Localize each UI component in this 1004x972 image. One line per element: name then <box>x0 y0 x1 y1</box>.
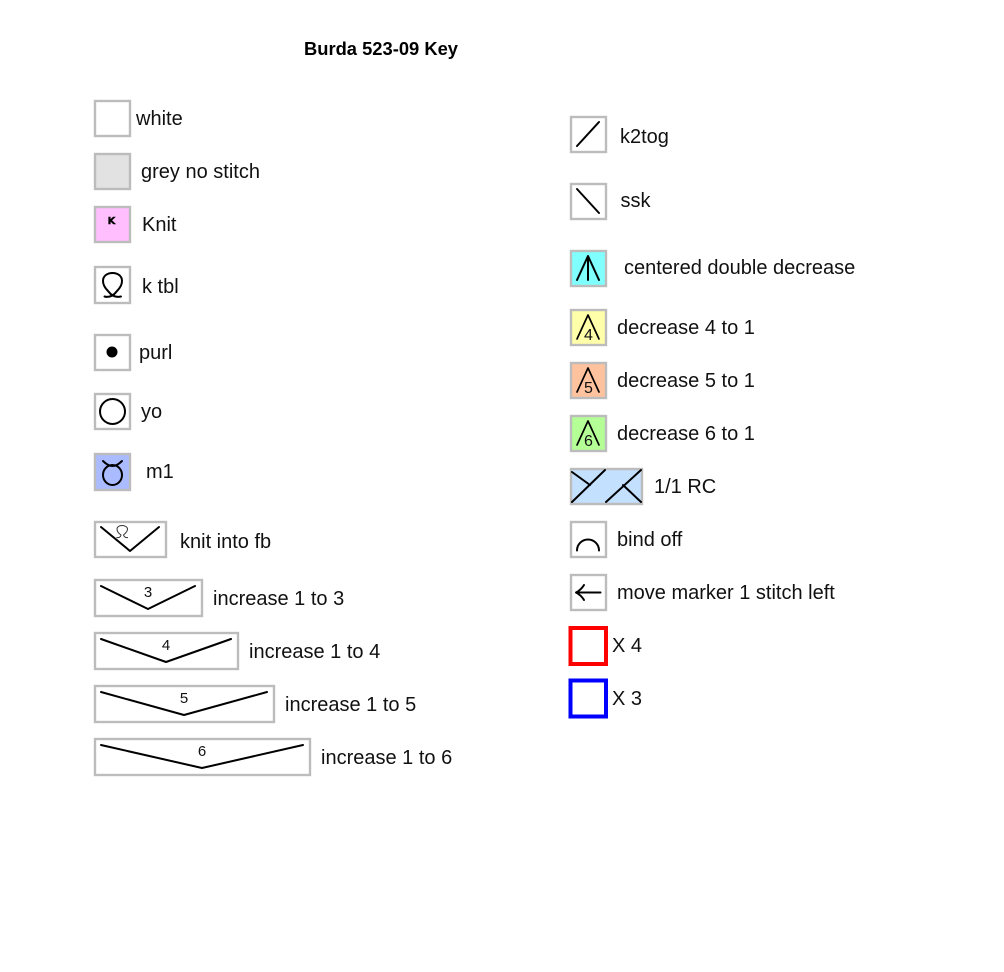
key item: decrease 5 to 1: 5 <box>584 380 593 397</box>
key item: decrease 6 to 1 <box>571 416 755 451</box>
title: Burda 523-09 Key <box>304 38 459 59</box>
key item: centered double decrease <box>571 251 855 286</box>
key item: m1: m1 <box>146 461 174 483</box>
key item: increase 1 to 6: increase 1 to 6 <box>321 747 452 769</box>
key item: ssk <box>571 184 652 219</box>
key item: increase 1 to 4: 4 <box>162 637 170 654</box>
key item: increase 1 to 5: 5 <box>180 690 188 707</box>
key item: k tbl <box>95 267 179 303</box>
key item: 1/1 RC: 1/1 RC <box>654 476 716 498</box>
key item: decrease 6 to 1: 6 <box>584 433 593 450</box>
key item: decrease 4 to 1: decrease 4 to 1 <box>617 317 755 339</box>
key item: increase 1 to 5: increase 1 to 5 <box>285 694 416 716</box>
key item: centered double decrease: centered double decrease <box>624 257 855 279</box>
key item: 1/1 RC <box>571 469 716 504</box>
key item: X 4: X 4 <box>612 635 642 657</box>
key item: decrease 4 to 1 <box>571 310 755 345</box>
key item: k2tog: k2tog <box>620 126 669 148</box>
key item: X 4 <box>570 628 642 664</box>
key item: decrease 5 to 1 <box>571 363 755 398</box>
key item: knit into fb: knit into fb <box>180 531 271 553</box>
key item: k tbl: k tbl <box>142 276 179 298</box>
key item: move marker: move marker 1 stitch left <box>617 582 835 604</box>
key item: knit: Knit <box>142 214 177 236</box>
key item: white <box>95 101 183 136</box>
key item: grey no stitch <box>95 154 260 189</box>
key item: increase 1 to 3 <box>95 580 344 616</box>
key item: knit <box>95 207 177 242</box>
key item: increase 1 to 4 <box>95 633 380 669</box>
key item: k2tog <box>571 117 669 152</box>
key item: move marker <box>571 575 835 610</box>
key item: knit: K <box>108 216 117 227</box>
key item: X 3: X 3 <box>612 688 642 710</box>
key item: X 3 <box>570 680 642 716</box>
key item: decrease 6 to 1: decrease 6 to 1 <box>617 423 755 445</box>
key item: increase 1 to 6: 6 <box>198 743 206 760</box>
key item: increase 1 to 4: increase 1 to 4 <box>249 641 380 663</box>
key item: purl: purl <box>139 342 172 364</box>
key item: yo <box>95 394 162 429</box>
key item: increase 1 to 3: increase 1 to 3 <box>213 588 344 610</box>
key item: increase 1 to 5 <box>95 686 416 722</box>
key item: increase 1 to 3: 3 <box>144 584 152 601</box>
key item: bind off <box>571 522 683 557</box>
key item: decrease 4 to 1: 4 <box>584 327 593 344</box>
key item: yo: yo <box>141 401 162 423</box>
key item: white: white <box>135 108 183 130</box>
key item: m1 <box>95 454 174 490</box>
key item: knit into fb <box>95 522 271 557</box>
key item: grey no stitch: grey no stitch <box>141 161 260 183</box>
key item: decrease 5 to 1: decrease 5 to 1 <box>617 370 755 392</box>
key item: increase 1 to 6 <box>95 739 452 775</box>
key item: ssk: ssk <box>620 190 652 212</box>
key item: purl <box>95 335 172 370</box>
key item: bind off: bind off <box>617 529 683 551</box>
